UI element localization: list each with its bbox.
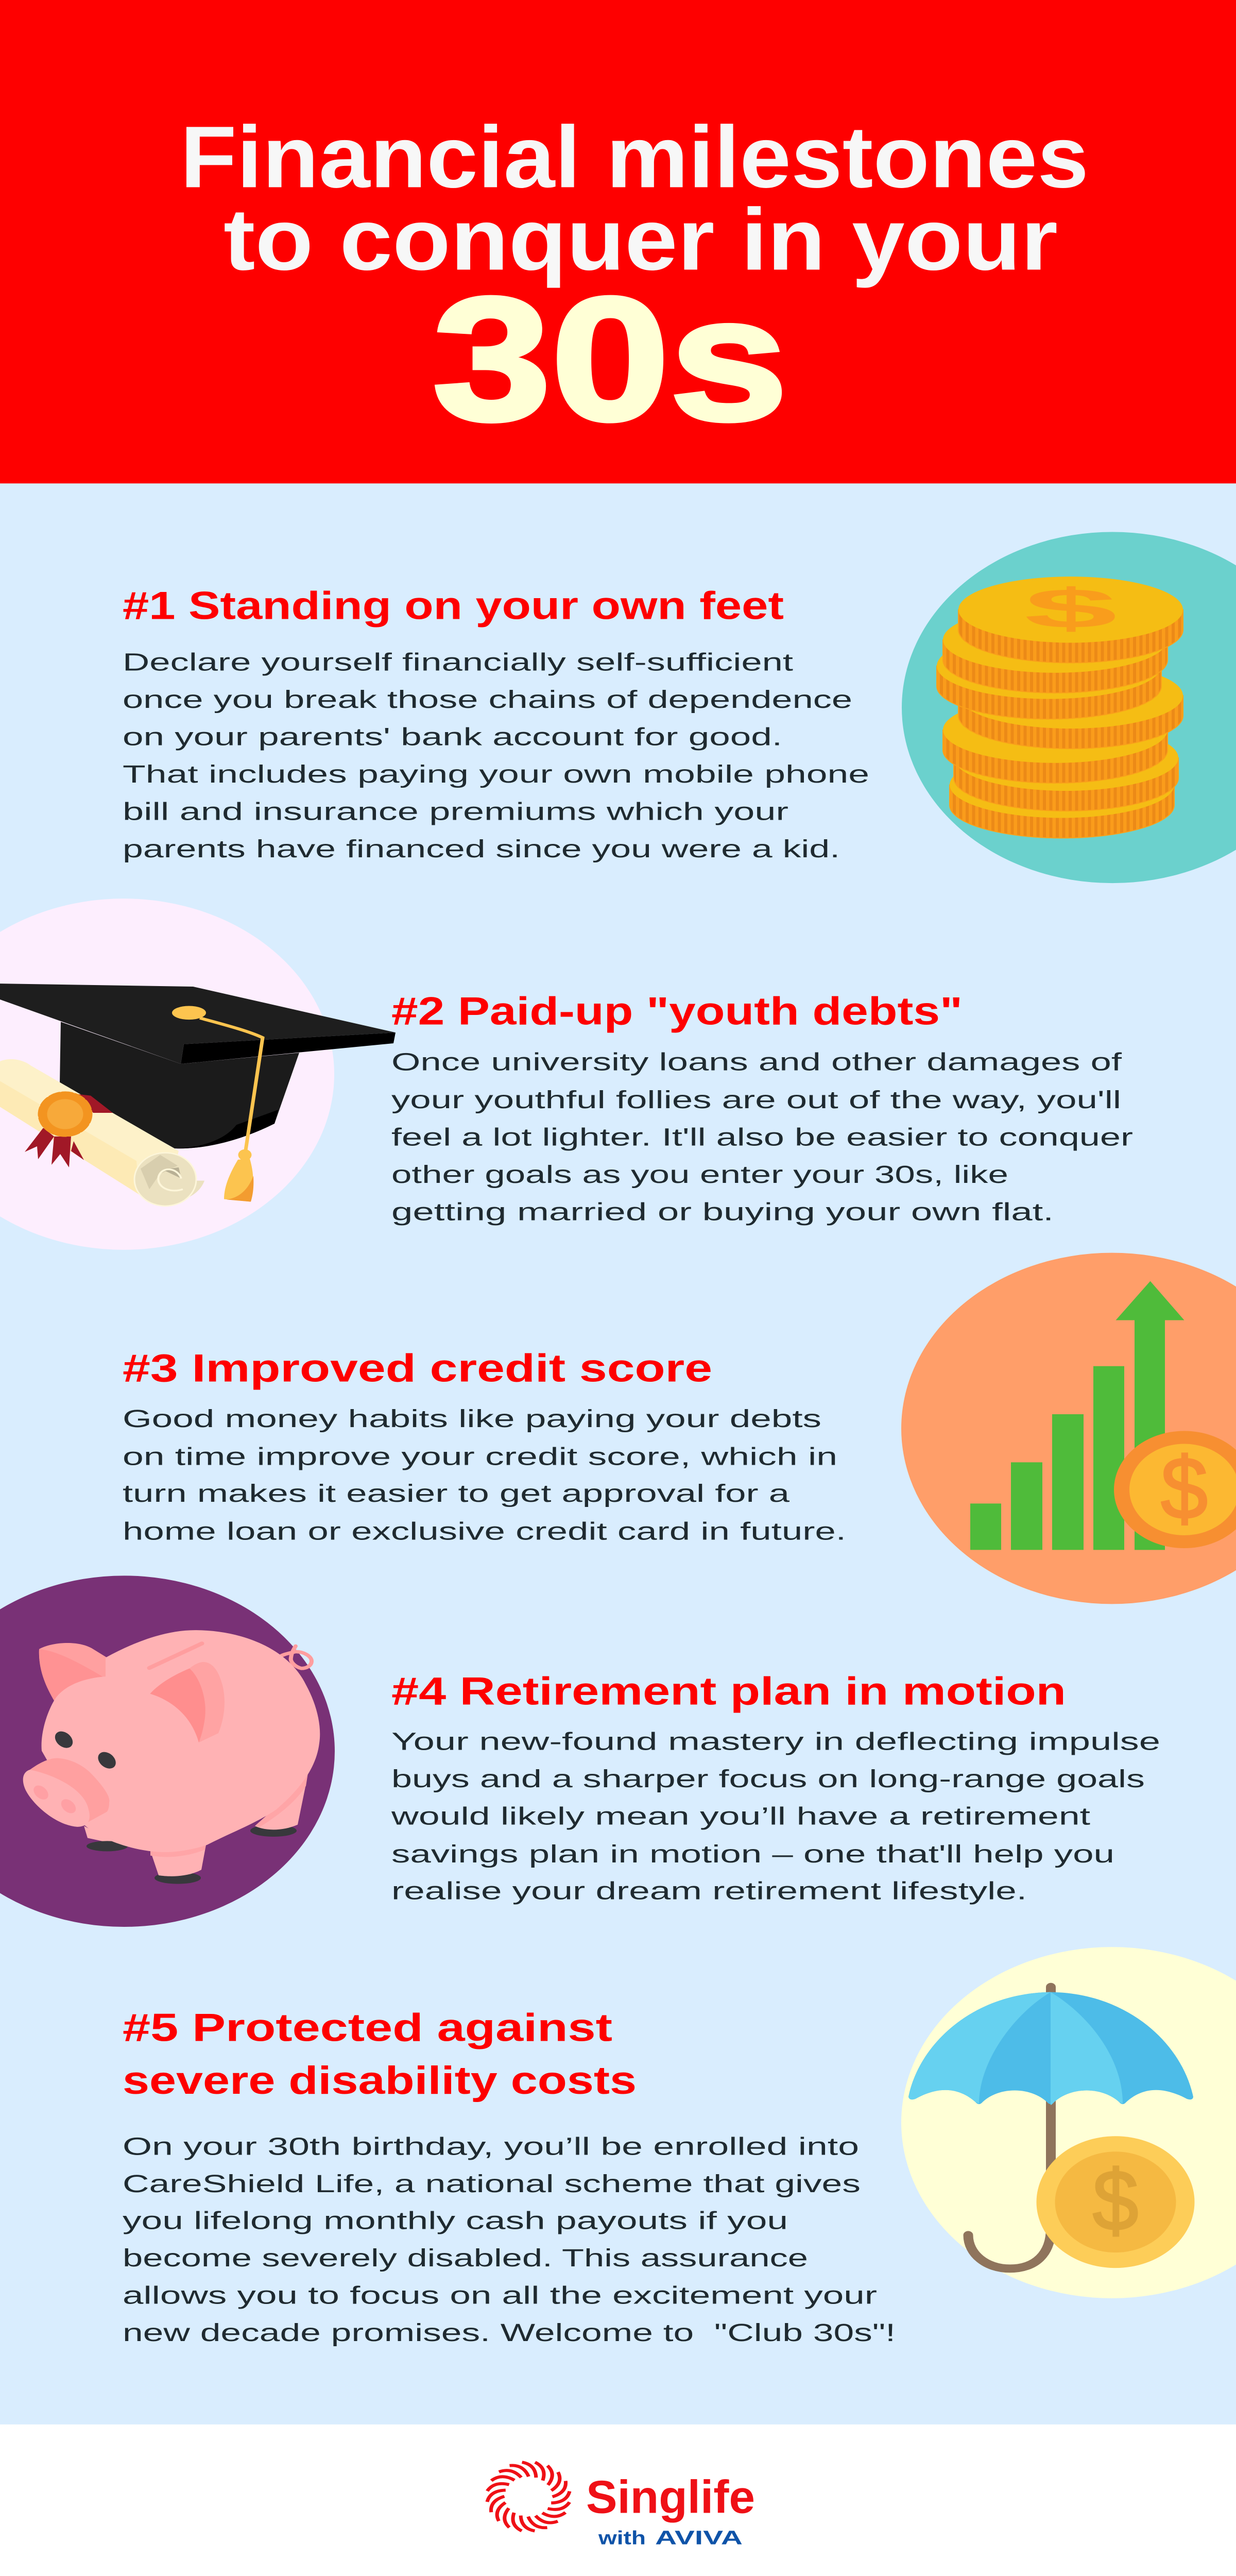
text block [123,649,869,863]
text block: would likely mean you’ll have a retirement [391,1803,1090,1831]
panel: milestone 5 [123,1947,1236,2347]
panel: milestone 2 [0,899,1133,1250]
icon: umbrella and coin [901,1947,1236,2298]
text block: home loan or exclusive credit card in future. [123,1518,846,1545]
text block: become severely disabled. This assurance [123,2245,808,2272]
heading: #4 Retirement plan in motion [391,1669,1066,1713]
title: to conquer in your [224,190,1058,289]
text block: parents have financed since you were a kid. [123,836,840,863]
logo wordmark: Singlife [586,2471,755,2523]
text block: new decade promises. Welcome to "Club 30s"! [123,2319,896,2347]
heading [123,2006,637,2102]
icon: piggy bank [0,1575,335,1927]
logo wordmark: AVIVA [655,2527,743,2548]
text block [391,1728,1160,1905]
text block: other goals as you enter your 30s, like [391,1161,1008,1189]
heading: #1 Standing on your own feet [123,584,784,628]
title: Financial milestones [180,108,1089,206]
text block: on time improve your credit score, which in [123,1443,837,1470]
logo: Singlife swirl [485,2460,572,2533]
panel: milestone 4 [0,1575,1160,1927]
text block: bill and insurance premiums which your [123,798,788,826]
text block: your youthful follies are out of the way, you'll [391,1086,1121,1114]
header banner [0,0,1236,483]
text block: realise your dream retirement lifestyle. [391,1877,1027,1905]
heading: #2 Paid-up "youth debts" [391,989,963,1033]
text block: Once university loans and other damages of [391,1048,1122,1076]
icon: graduation cap and diploma [0,899,396,1250]
text block [123,2133,896,2347]
heading: #3 Improved credit score [123,1346,712,1390]
icon: coin stack: $ [1024,578,1117,640]
text block: getting married or buying your own flat. [391,1198,1054,1226]
icon: growth chart with coin [901,1253,1236,1604]
text block: On your 30th birthday, you’ll be enrolled into [123,2133,859,2160]
text block: allows you to focus on all the excitement your [123,2282,877,2310]
heading: #5 Protected against [123,2006,612,2049]
text block: you lifelong monthly cash payouts if you [123,2207,788,2235]
panel: milestone 3 [123,1253,1236,1604]
text block: once you break those chains of dependence [123,686,852,714]
text block: That includes paying your own mobile phone [123,761,869,788]
text block: Your new-found mastery in deflecting impulse [391,1728,1160,1756]
text block: buys and a sharper focus on long-range goals [391,1766,1145,1793]
heading: severe disability costs [123,2058,637,2102]
title [180,108,1089,457]
logo wordmark: with [598,2527,646,2548]
text block: turn makes it easier to get approval for a [123,1480,789,1507]
text block: Declare yourself financially self-sufficient [123,649,793,676]
icon: growth chart with coin: $ [1161,1439,1208,1537]
logo wordmark [586,2471,755,2548]
title: 30s [433,261,788,457]
icon: umbrella and coin: $ [1093,2152,1138,2248]
icon: coin stack [902,532,1236,883]
text block: Good money habits like paying your debts [123,1405,821,1433]
text block: savings plan in motion – one that'll help you [391,1840,1114,1868]
footer [0,2425,1236,2576]
text block [123,1405,846,1545]
text block [391,1048,1133,1226]
text block: CareShield Life, a national scheme that gives [123,2170,861,2198]
text block: feel a lot lighter. It'll also be easier to conquer [391,1124,1133,1151]
panel: milestone 1 [123,532,1236,883]
text block: on your parents' bank account for good. [123,723,782,751]
